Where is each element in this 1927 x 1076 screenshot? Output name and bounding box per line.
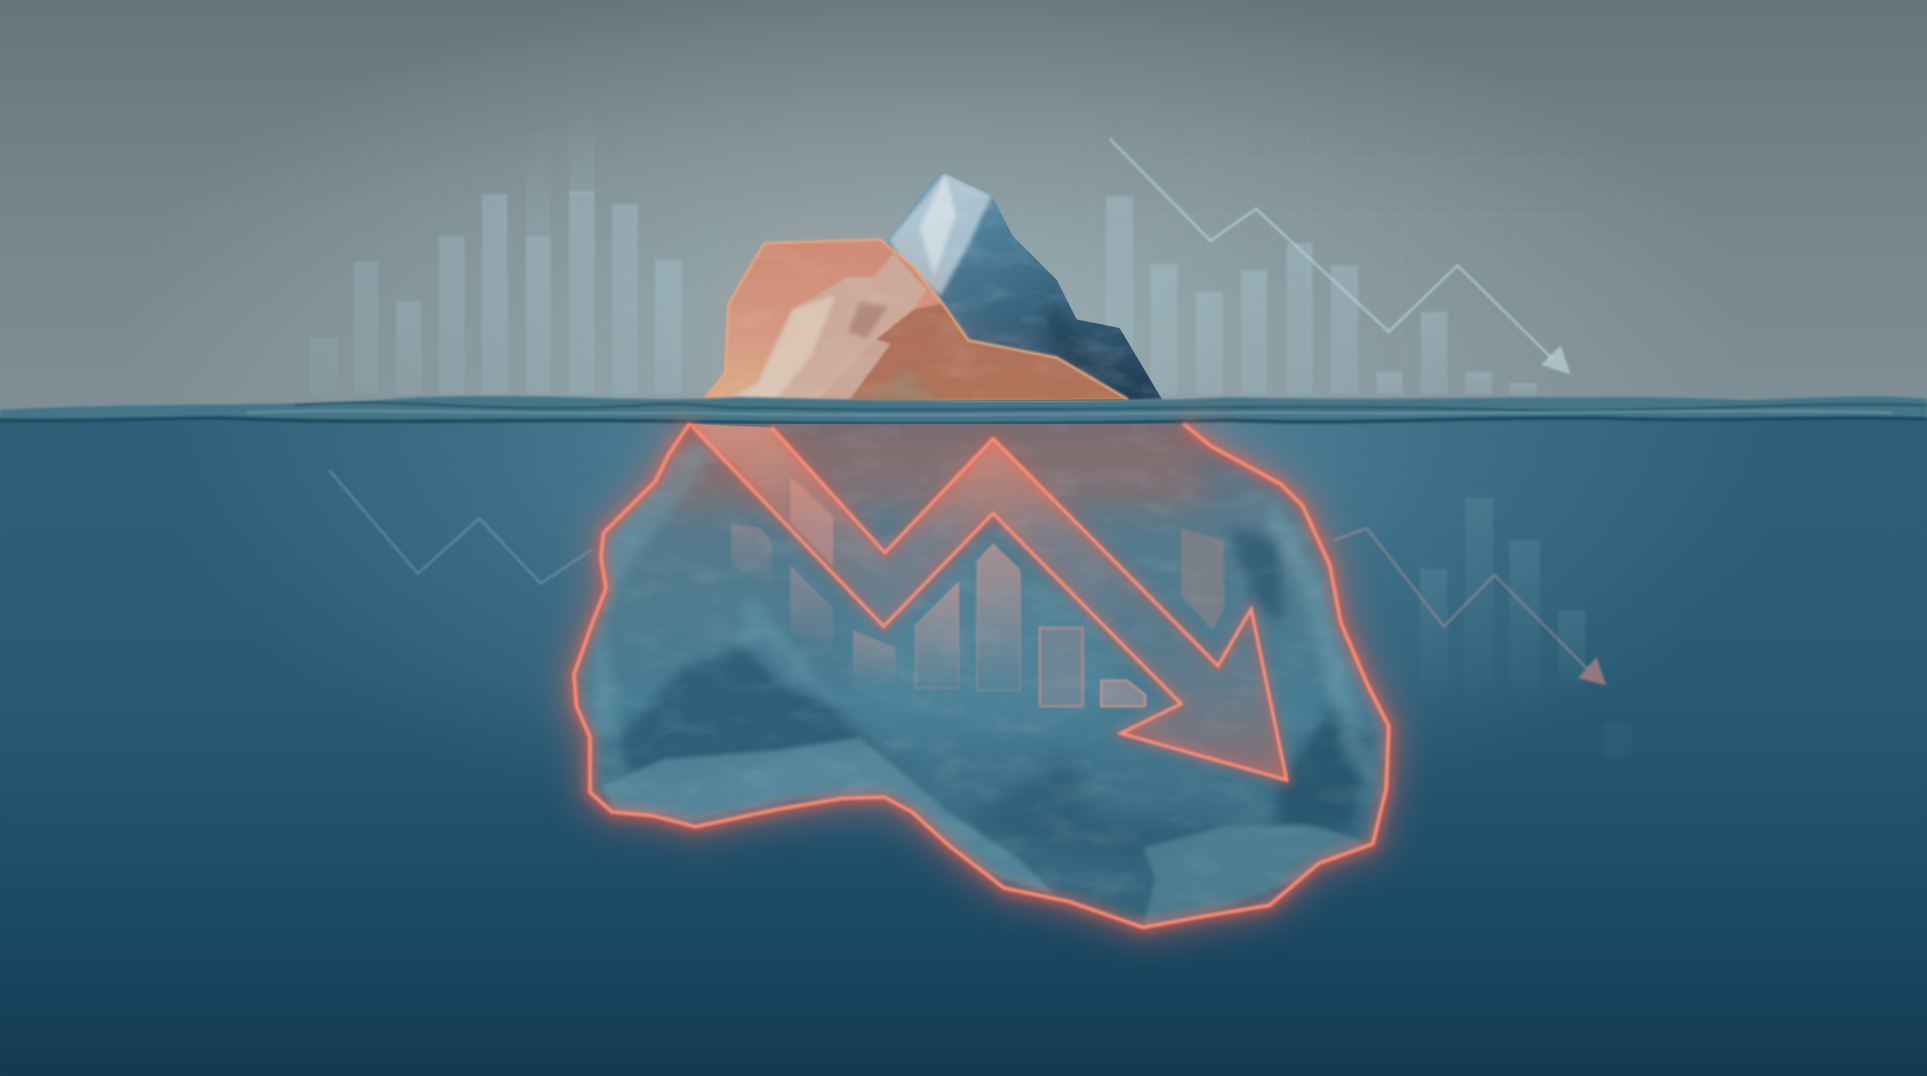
right falling bar chart <box>1089 98 1585 394</box>
underwater right trend arrow <box>1333 528 1606 685</box>
sky background <box>0 0 1927 418</box>
underwater left trend line <box>329 470 592 583</box>
right falling trend arrow <box>1110 139 1571 375</box>
left rising bar chart <box>310 98 682 394</box>
glowing iceberg outline <box>574 424 1389 927</box>
water surface line <box>0 395 1927 424</box>
submerged iceberg body <box>565 418 1401 934</box>
deep water background <box>0 418 1927 1076</box>
chart bars inside iceberg <box>731 477 1224 706</box>
orange highlighted overlay on peak <box>702 240 1137 405</box>
underwater right bar chart <box>1419 497 1632 757</box>
submerged iceberg glow <box>574 424 1389 927</box>
iceberg peak above water <box>886 174 1162 401</box>
glowing downward arrow <box>689 424 1287 780</box>
